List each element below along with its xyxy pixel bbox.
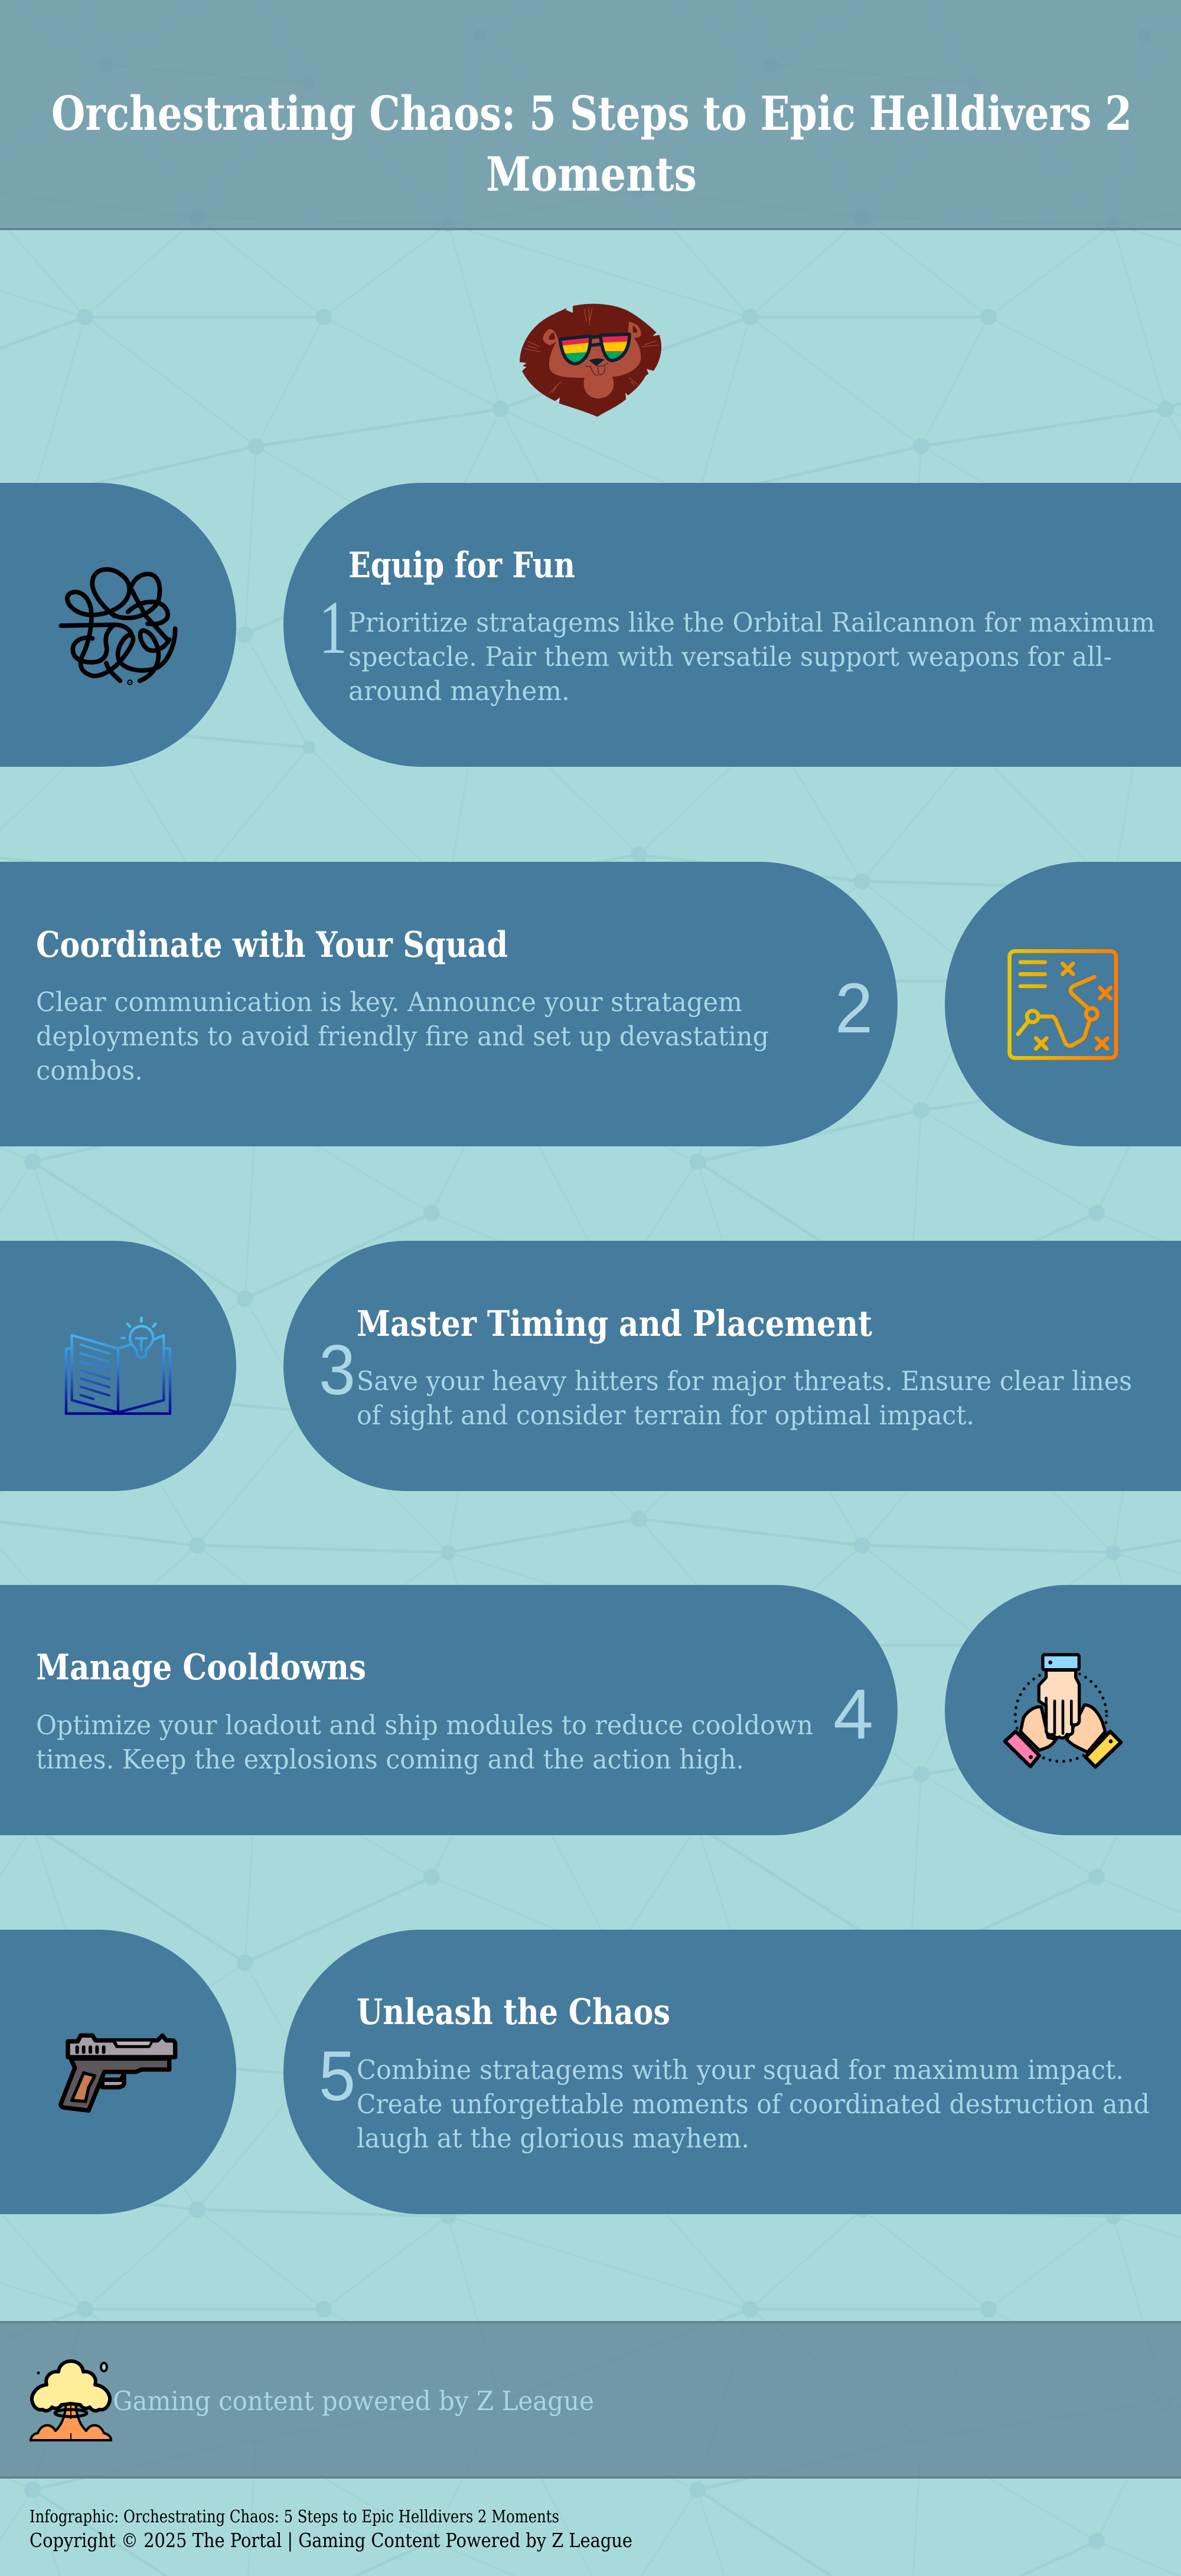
panel: step 1 xyxy=(0,483,1181,767)
step 5 description: Create unforgettable moments of coordinated destruction and xyxy=(357,2088,1150,2120)
step 4 description: Optimize your loadout and ship modules to reduce cooldown xyxy=(36,1709,813,1741)
panel: step 1 content xyxy=(283,483,1181,767)
step 1 description: Prioritize stratagems like the Orbital Railcannon for maximum xyxy=(348,607,1155,638)
icon: tactical map xyxy=(1010,951,1116,1058)
step 2 description: Clear communication is key. Announce your stratagem xyxy=(36,986,742,1018)
icon: open book with lightbulb xyxy=(66,1318,170,1414)
panel: step 4 content xyxy=(0,1585,898,1835)
footer credits: Infographic: Orchestrating Chaos: 5 Steps to Epic Helldivers 2 Moments xyxy=(30,2506,559,2526)
step 2 heading: Coordinate with Your Squad xyxy=(36,924,508,966)
panel: step 5 icon circle xyxy=(0,1930,236,2214)
number 4: 4 xyxy=(833,1675,873,1754)
step 4 description: times. Keep the explosions coming and the action high. xyxy=(36,1744,744,1775)
panel: step 2 xyxy=(0,862,1181,1146)
header band with title xyxy=(0,0,1181,230)
panel: step 4 icon circle xyxy=(945,1585,1181,1835)
step 3 description: Save your heavy hitters for major threats. Ensure clear lines xyxy=(357,1365,1132,1397)
icon: tangled scribble xyxy=(61,570,175,683)
step 5 description: Combine stratagems with your squad for maximum impact. xyxy=(357,2054,1124,2085)
icon: pistol xyxy=(61,2035,175,2110)
step 1 description: spectacle. Pair them with versatile support weapons for all- xyxy=(348,641,1112,672)
step 4 heading: Manage Cooldowns xyxy=(36,1647,366,1688)
panel: step 3 xyxy=(0,1241,1181,1491)
title xyxy=(51,86,1132,202)
panel: step 3 icon circle xyxy=(0,1241,236,1491)
footer credits xyxy=(30,2506,632,2552)
step 3 description: of sight and consider terrain for optimal impact. xyxy=(357,1400,974,1431)
number 1: 1 xyxy=(319,586,347,669)
panel: step 4 xyxy=(0,1585,1181,1835)
step 5 heading: Unleash the Chaos xyxy=(357,1992,670,2033)
number 2: 2 xyxy=(835,969,873,1048)
title: Moments xyxy=(486,146,697,202)
step 5 description xyxy=(357,2054,1150,2154)
number 5: 5 xyxy=(319,2036,355,2116)
step 3 heading: Master Timing and Placement xyxy=(357,1303,872,1345)
step 2 description: deployments to avoid friendly fire and set up devastating xyxy=(36,1021,769,1052)
step 1 description xyxy=(348,607,1155,707)
step 4 description xyxy=(36,1709,813,1775)
panel: step 5 xyxy=(0,1930,1181,2214)
step 3 description xyxy=(357,1365,1132,1431)
icon: mushroom cloud explosion xyxy=(30,2361,112,2441)
step 1 description: around mayhem. xyxy=(348,675,570,707)
footer band xyxy=(0,2321,1181,2479)
footer tagline: Gaming content powered by Z League xyxy=(113,2385,594,2417)
step 5 description: laugh at the glorious mayhem. xyxy=(357,2123,749,2154)
step 1 heading: Equip for Fun xyxy=(348,545,575,586)
number 3: 3 xyxy=(319,1331,355,1410)
step 2 description xyxy=(36,986,769,1086)
step 2 description: combos. xyxy=(36,1055,143,1086)
panel: step 2 content xyxy=(0,862,898,1146)
icon: three joined hands xyxy=(1005,1655,1121,1767)
panel: step 5 content xyxy=(283,1930,1181,2214)
footer credits: Copyright © 2025 The Portal | Gaming Content Powered by Z League xyxy=(30,2529,632,2552)
panel: step 3 content xyxy=(283,1241,1181,1491)
panel: step 2 icon circle xyxy=(945,862,1181,1146)
icon: lion head with rainbow sunglasses xyxy=(520,304,661,417)
panel: step 1 icon circle xyxy=(0,483,236,767)
